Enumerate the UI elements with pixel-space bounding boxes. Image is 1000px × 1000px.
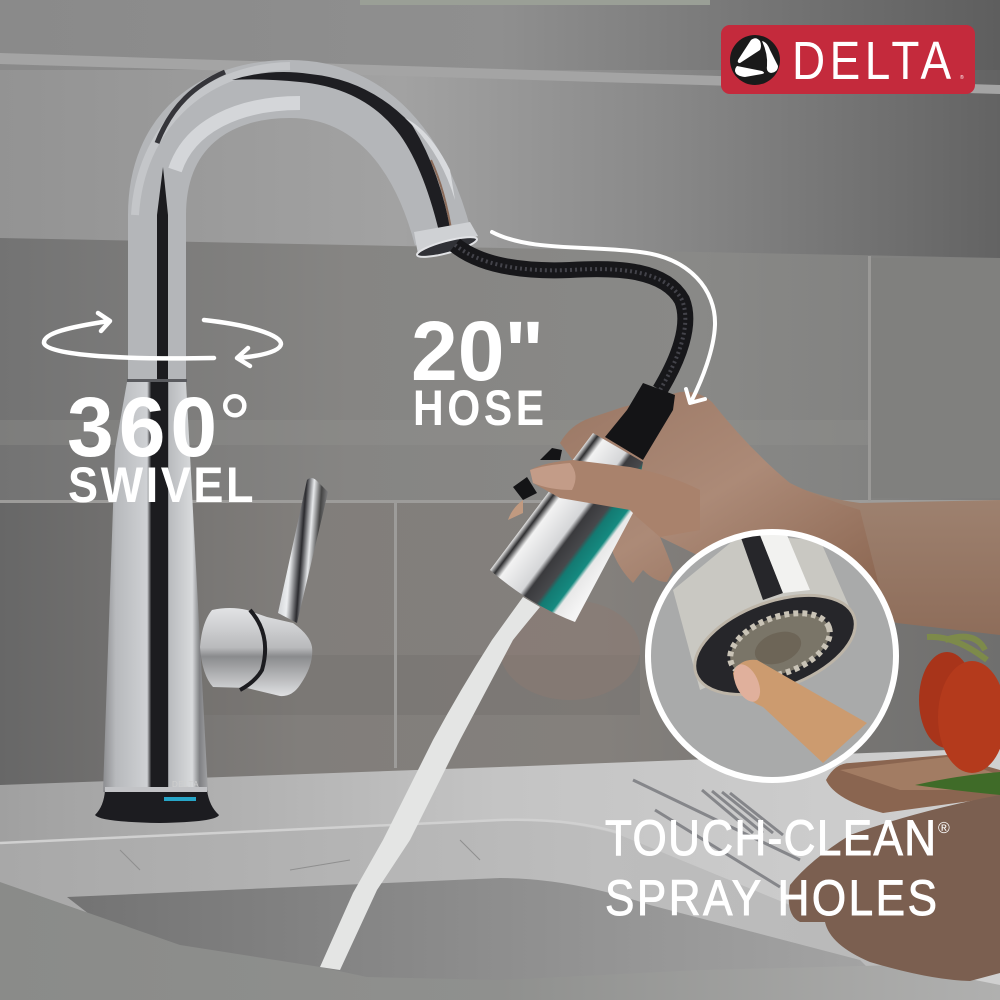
background: kitchen wall <box>0 0 1000 788</box>
water stream <box>320 597 540 970</box>
logo: Delta: ® <box>960 74 964 81</box>
icon: curved arrow, 20 inch hose length <box>492 232 715 403</box>
thumb over sprayer <box>530 460 700 537</box>
icon: 360 degree swivel rotation arrows <box>44 313 281 366</box>
callout: touch-clean spray holes <box>605 809 950 926</box>
tomatoes and cutting board <box>826 637 1000 813</box>
callout: 360 degree swivel <box>67 377 256 514</box>
countertop and sink <box>0 748 1000 1000</box>
callout: 20 inch hose <box>411 304 548 436</box>
faucet handle <box>200 478 328 696</box>
forks <box>633 780 800 887</box>
callout: 20 inch hose: 20" <box>411 304 544 398</box>
hose <box>455 245 685 390</box>
faucet spout arch <box>135 66 478 400</box>
icon: Delta droplet triangle <box>730 35 780 85</box>
forearm and hand <box>508 392 1000 635</box>
callout: 20 inch hose: HOSE <box>413 380 548 436</box>
callout: 360 degree swivel: ° <box>218 377 252 471</box>
callout: 360 degree swivel: SWIVEL <box>68 458 256 514</box>
callout: touch-clean spray holes: ® <box>938 820 950 837</box>
faucet base with blue indicator: DELTA <box>172 780 199 789</box>
callout: touch-clean spray holes: TOUCH-CLEAN <box>605 809 937 866</box>
logo: Delta: DELTA <box>792 31 956 91</box>
logo: Delta <box>721 25 975 94</box>
faucet body <box>103 379 208 792</box>
foreground hand bottom right <box>789 795 1000 981</box>
callout: 360 degree swivel: 360 <box>67 380 222 474</box>
circular inset: touch-clean spray holes <box>648 532 896 780</box>
faucet base with blue indicator <box>95 780 219 823</box>
sprayer head <box>490 383 675 622</box>
callout: touch-clean spray holes: SPRAY HOLES <box>605 869 939 926</box>
